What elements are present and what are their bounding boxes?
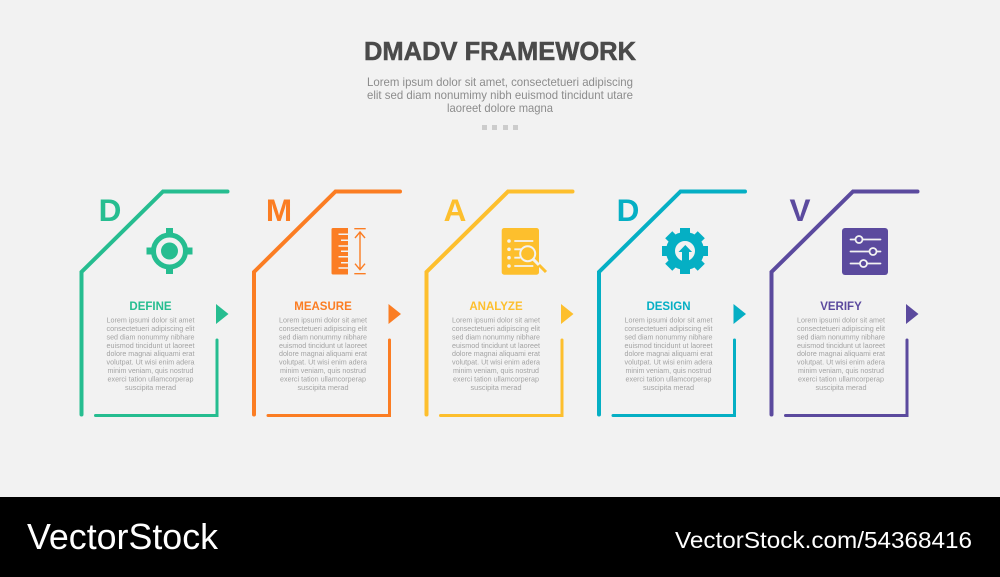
- body text: measure: euismod tincidunt ut laoreet: [279, 341, 367, 350]
- body text: verify: Lorem ipsumi dolor sit amet: [797, 316, 885, 324]
- bracket: design: [613, 340, 734, 416]
- icon: document search: [502, 228, 546, 275]
- body text: design: suscipita merad: [643, 383, 694, 392]
- body text: verify: suscipita merad: [816, 383, 866, 392]
- body text: define: volutpat. Ut wisi enim adera: [106, 358, 195, 367]
- letter V: V: [789, 192, 811, 228]
- body text: define: dolore magnai aliquami erat: [106, 349, 194, 358]
- heading: analyze: ANALYZE: [469, 301, 523, 313]
- letter D: D: [99, 192, 121, 228]
- body text: analyze: dolore magnai aliquami erat: [452, 349, 540, 358]
- footer url text: VectorStock.com/54368416: [675, 527, 972, 553]
- icon: ruler: [332, 228, 366, 274]
- body text: design: Lorem ipsumi dolor sit amet: [624, 316, 712, 324]
- bracket: define: [96, 340, 217, 416]
- body text: define: [106, 316, 195, 392]
- title: DMADV FRAMEWORK: [364, 38, 637, 66]
- body text: analyze: volutpat. Ut wisi enim adera: [452, 358, 541, 367]
- panel: measure: [254, 192, 401, 416]
- bracket: measure: [268, 340, 390, 416]
- panel: verify: [772, 192, 918, 416]
- body text: measure: consectetueri adipiscing elit: [279, 324, 367, 333]
- card outline: analyze: [426, 192, 572, 414]
- body text: define: Lorem ipsumi dolor sit amet: [106, 316, 194, 324]
- heading: measure: MEASURE: [294, 301, 352, 313]
- body text: measure: suscipita merad: [298, 383, 348, 392]
- letter D: D: [617, 192, 639, 228]
- arrow: measure: [388, 304, 401, 324]
- body text: measure: minim veniam, quis nostrud: [280, 366, 366, 375]
- subtitle text: elit sed diam nonumimy nibh euismod tincidunt utare: [367, 89, 633, 102]
- heading: define: DEFINE: [129, 301, 172, 313]
- body text: design: exerci tation ullamcorperap: [626, 374, 712, 383]
- icon: target: [146, 228, 192, 274]
- body text: verify: exerci tation ullamcorperap: [798, 374, 884, 383]
- body text: design: sed diam nonummy nibhare: [624, 332, 712, 341]
- body text: design: volutpat. Ut wisi enim adera: [624, 358, 713, 367]
- body text: measure: exerci tation ullamcorperap: [280, 374, 366, 383]
- heading: design: DESIGN: [646, 301, 691, 313]
- body text: design: euismod tincidunt ut laoreet: [624, 341, 712, 350]
- body text: analyze: sed diam nonummy nibhare: [452, 332, 540, 341]
- panel: define: [82, 192, 228, 416]
- body text: analyze: minim veniam, quis nostrud: [453, 366, 539, 375]
- body text: measure: [279, 316, 368, 392]
- subtitle text: Lorem ipsum dolor sit amet, consectetueri adipiscing: [367, 76, 633, 89]
- arrow: design: [734, 304, 746, 324]
- footer bar: [0, 497, 1000, 577]
- body text: measure: volutpat. Ut wisi enim adera: [279, 358, 368, 367]
- body text: define: sed diam nonummy nibhare: [106, 332, 194, 341]
- heading: verify: VERIFY: [820, 301, 862, 313]
- body text: measure: sed diam nonummy nibhare: [279, 332, 367, 341]
- arrow: verify: [906, 304, 918, 324]
- body text: measure: Lorem ipsumi dolor sit amet: [279, 316, 367, 324]
- body text: design: minim veniam, quis nostrud: [626, 366, 712, 375]
- bracket: verify: [786, 340, 907, 416]
- card outline: design: [599, 192, 745, 414]
- body text: define: suscipita merad: [125, 383, 176, 392]
- body text: define: consectetueri adipiscing elit: [106, 324, 194, 333]
- card outline: verify: [772, 192, 918, 414]
- icon: sliders: [842, 228, 888, 275]
- body text: analyze: consectetueri adipiscing elit: [452, 324, 540, 333]
- letter M: M: [266, 192, 292, 228]
- body text: analyze: euismod tincidunt ut laoreet: [452, 341, 540, 350]
- pagination dots: [482, 125, 518, 130]
- body text: verify: [797, 316, 886, 392]
- body text: verify: volutpat. Ut wisi enim adera: [797, 358, 886, 367]
- card outline: define: [82, 192, 228, 414]
- body text: analyze: Lorem ipsumi dolor sit amet: [452, 316, 540, 324]
- subtitle text: [367, 76, 633, 115]
- body text: verify: euismod tincidunt ut laoreet: [797, 341, 885, 350]
- letter A: A: [444, 192, 466, 228]
- body text: verify: consectetueri adipiscing elit: [797, 324, 885, 333]
- panel: analyze: [426, 192, 574, 416]
- body text: analyze: [452, 316, 541, 392]
- body text: analyze: exerci tation ullamcorperap: [453, 374, 539, 383]
- icon: gear with arrow: [652, 218, 718, 284]
- panel: design: [599, 192, 746, 416]
- card outline: measure: [254, 192, 400, 414]
- body text: define: exerci tation ullamcorperap: [108, 374, 194, 383]
- body text: design: consectetueri adipiscing elit: [624, 324, 712, 333]
- arrow: analyze: [561, 304, 574, 324]
- body text: define: minim veniam, quis nostrud: [108, 366, 194, 375]
- subtitle text: laoreet dolore magna: [447, 102, 554, 115]
- arrow: define: [216, 304, 228, 324]
- body text: verify: sed diam nonummy nibhare: [797, 332, 885, 341]
- body text: measure: dolore magnai aliquami erat: [279, 349, 367, 358]
- body text: design: dolore magnai aliquami erat: [624, 349, 712, 358]
- footer logo text: VectorStock: [27, 516, 219, 557]
- body text: define: euismod tincidunt ut laoreet: [106, 341, 194, 350]
- bracket: analyze: [440, 340, 562, 416]
- body text: verify: minim veniam, quis nostrud: [798, 366, 884, 375]
- body text: analyze: suscipita merad: [470, 383, 522, 392]
- body text: design: [624, 316, 713, 392]
- body text: verify: dolore magnai aliquami erat: [797, 349, 885, 358]
